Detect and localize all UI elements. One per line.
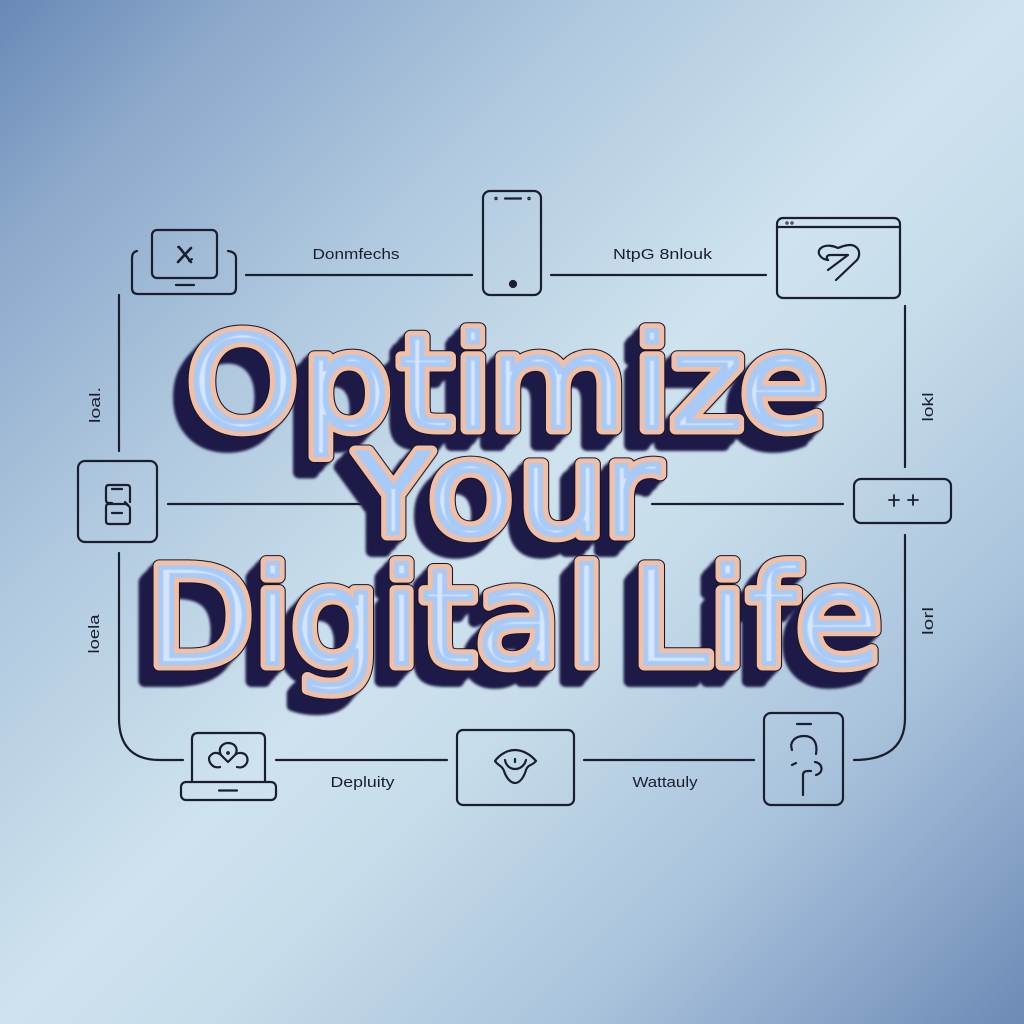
label: upper left side: loal. bbox=[87, 387, 104, 423]
label: top left: Donmfechs bbox=[312, 246, 400, 263]
label: top right: NtpG 8nlouk bbox=[613, 246, 713, 263]
title line: Your: Y bbox=[354, 429, 432, 563]
icon: tall bottom right box bbox=[764, 713, 843, 805]
title line: Your: our bbox=[428, 414, 661, 566]
title bbox=[145, 307, 882, 697]
title line: Your: our bbox=[428, 414, 661, 566]
icon: smartphone bbox=[483, 191, 541, 295]
title line: Your: our bbox=[428, 414, 661, 566]
title line: Your: Y bbox=[354, 429, 432, 563]
icon: monitor with tools bbox=[132, 230, 236, 294]
label: upper right side: lokl bbox=[920, 392, 937, 422]
label: bottom left: Depluity bbox=[330, 774, 395, 791]
title line: Digital Life: Digital Life bbox=[145, 539, 882, 697]
title line: Digital Life: Digital Life bbox=[145, 539, 882, 697]
icon: right wide box with plus signs bbox=[854, 479, 951, 523]
label: lower left side: loela bbox=[86, 614, 103, 654]
connector lines bbox=[119, 275, 905, 760]
title line: Digital Life: Digital Life bbox=[145, 539, 882, 697]
title line: Your: Y bbox=[354, 429, 432, 563]
title line: Digital Life: Digital Life bbox=[145, 539, 882, 697]
icon: browser window with heart bbox=[777, 218, 900, 298]
icon: laptop with cloud bbox=[181, 733, 276, 800]
title line: Optimize: Optimize bbox=[187, 307, 827, 461]
title line: Your: Y bbox=[354, 429, 432, 563]
title line: Optimize: Optimize bbox=[187, 307, 827, 461]
label: lower right side: lorl bbox=[920, 607, 937, 635]
title line: Your: our bbox=[428, 414, 661, 566]
title line: Your: our bbox=[428, 414, 661, 566]
icon: left square box bbox=[78, 461, 157, 542]
title line: Optimize: Optimize bbox=[187, 307, 827, 461]
label: bottom right: Wattauly bbox=[632, 774, 698, 791]
title line: Optimize: Optimize bbox=[187, 307, 827, 461]
icon: bottom box with leaf mark bbox=[457, 730, 574, 805]
title line: Digital Life: Digital Life bbox=[145, 539, 882, 697]
title line: Optimize: Optimize bbox=[187, 307, 827, 461]
title line: Your: Y bbox=[354, 429, 432, 563]
